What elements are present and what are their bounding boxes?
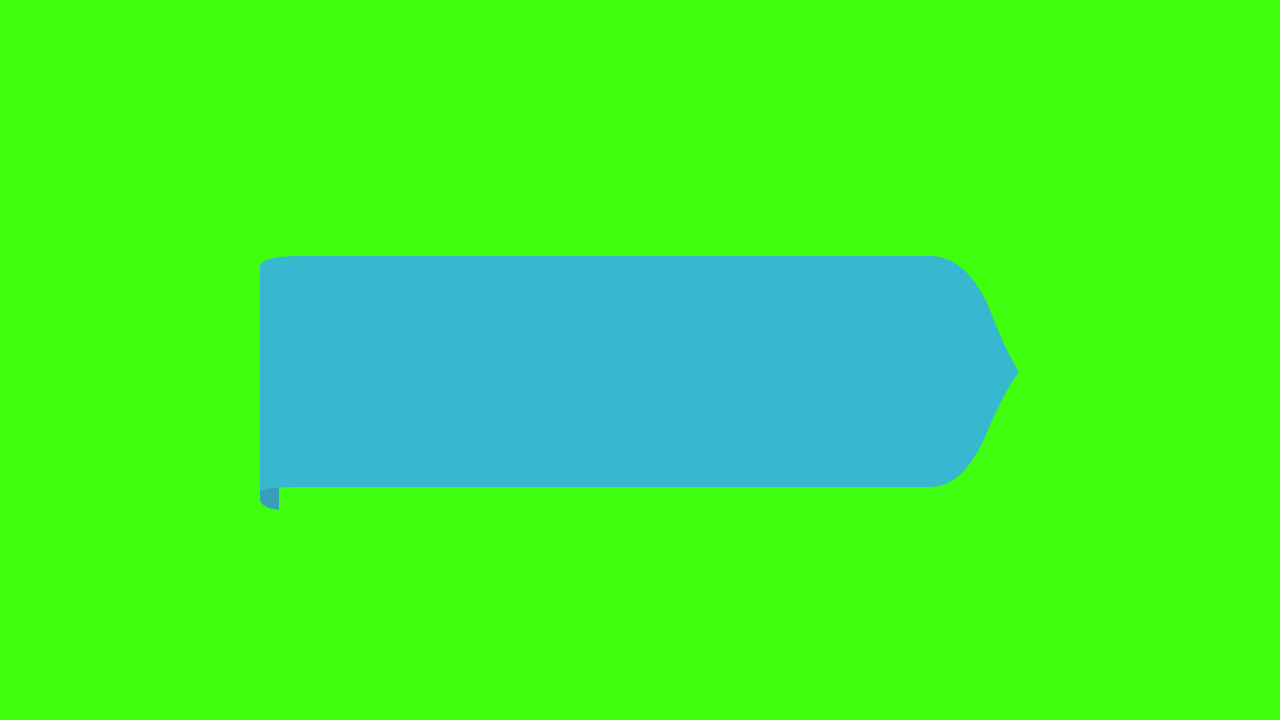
banner: ribbon arrow shape	[260, 256, 1019, 510]
banner main body	[260, 256, 1019, 492]
banner curl at bottom-left	[260, 488, 279, 510]
